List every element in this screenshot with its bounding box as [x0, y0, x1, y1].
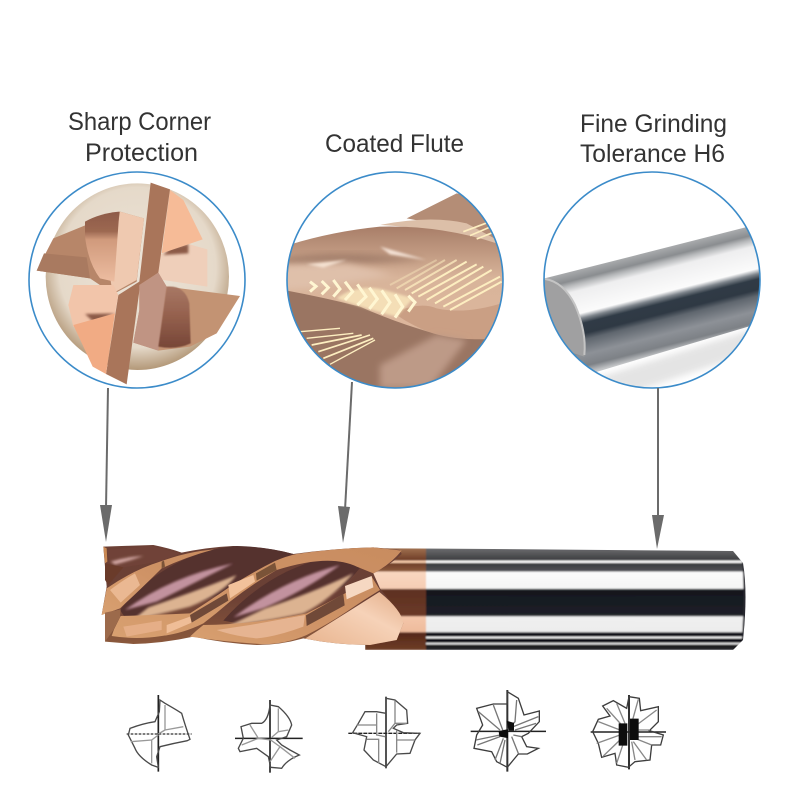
cross-section icon: six flutes	[471, 690, 546, 772]
end mill tool	[102, 545, 750, 650]
heading: Fine Grinding Tolerance H6	[580, 110, 727, 168]
cross-section icon: three flutes	[235, 700, 303, 773]
infographic: end mill features	[28, 112, 761, 773]
panel: sharp corner close-up	[29, 172, 245, 388]
heading: Coated Flute: Coated Flute	[325, 130, 464, 158]
heading: Fine Grinding Tolerance H6: Tolerance H6	[580, 140, 725, 168]
tool flutes	[102, 545, 403, 645]
arrow: corner callout to tool tip	[100, 388, 112, 542]
cross-section icon: four flutes	[348, 697, 420, 768]
heading: Sharp Corner Protection: Sharp Corner	[68, 108, 211, 136]
heading: Sharp Corner Protection	[68, 108, 211, 167]
panel: coated flute close-up	[283, 172, 510, 398]
tool shank	[365, 548, 750, 650]
arrow: grinding callout to shank	[652, 388, 664, 549]
cross-section icon: two flutes	[127, 695, 192, 772]
panel: fine grinding shank close-up	[538, 172, 765, 392]
cross-section icon: eight flutes	[591, 695, 666, 769]
heading: Fine Grinding Tolerance H6: Fine Grinding	[580, 110, 727, 138]
arrow: flute callout to flute	[338, 382, 352, 543]
heading: Sharp Corner Protection: Protection	[85, 139, 198, 167]
